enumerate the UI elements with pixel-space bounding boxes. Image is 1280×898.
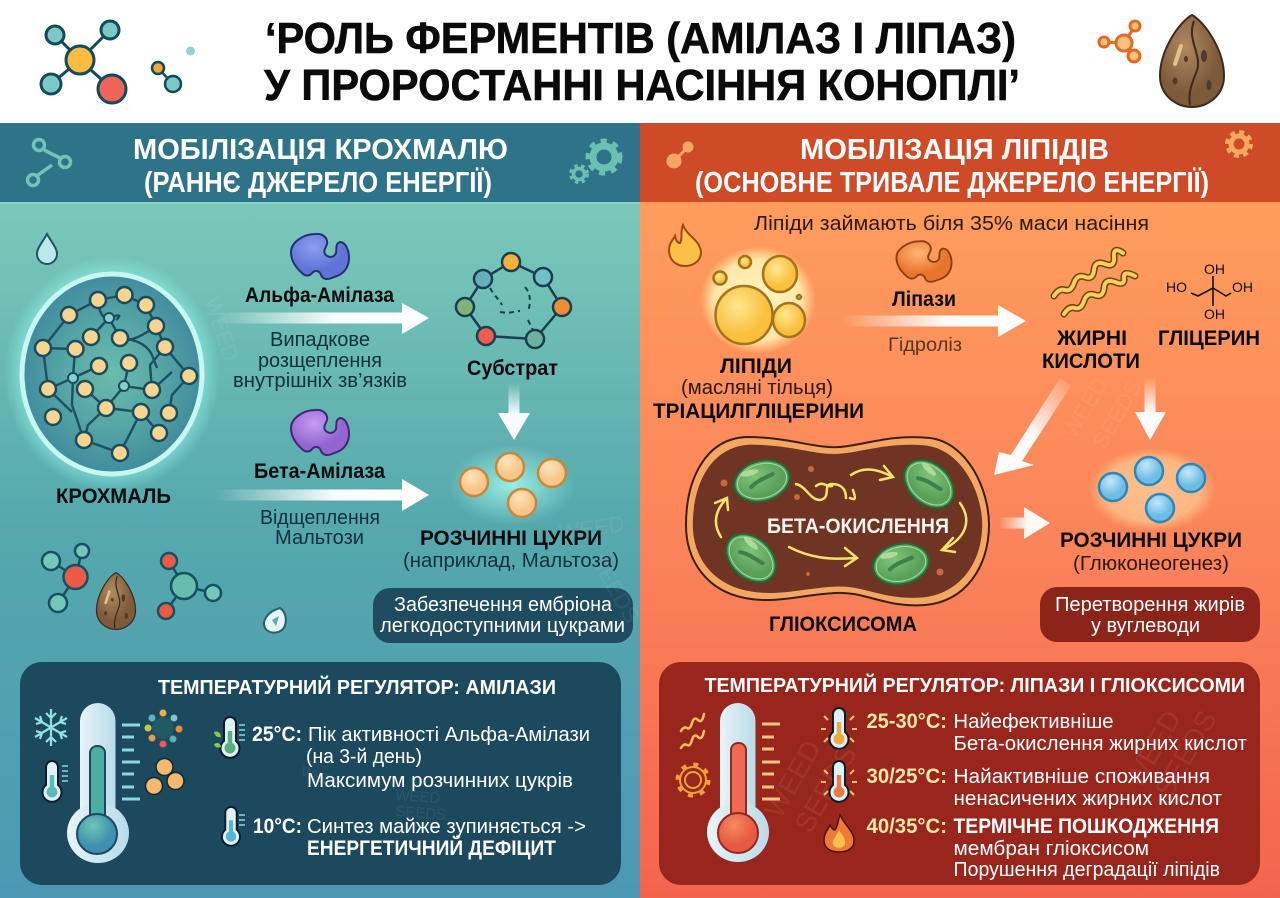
watermarks: WEED [557, 511, 626, 545]
label: soluble sugars right [1060, 528, 1242, 575]
text: 10C row: Синтез майже зупиняється -> [307, 815, 586, 838]
label: glyoxysome: ГЛІОКСИСОМА [769, 613, 917, 636]
panel: lipase temperature regulator [659, 662, 1260, 885]
icon: glycerol formula: HO [1166, 279, 1187, 295]
icon: molecule lower middle [158, 553, 221, 619]
icon: waves [681, 714, 704, 748]
label: lipids [653, 355, 864, 423]
text: 25C row: 25°C: [252, 723, 302, 746]
text: random cleavage: розщеплення [258, 349, 382, 372]
label: lipases: Ліпази [892, 288, 956, 311]
arrow: starch to sugars [215, 479, 429, 511]
icon: orange molecule top right [1099, 21, 1140, 62]
text: 40/35C row [866, 815, 1220, 881]
callout: fat conversion: у вуглеводи [1091, 615, 1200, 637]
icon: small thermometer [42, 761, 68, 802]
arrow: substrate down to sugars [498, 383, 530, 440]
icon: substrate ring [456, 253, 571, 348]
icon: alpha amylase enzyme [291, 234, 349, 279]
callout: fat conversion: Перетворення жирів [1055, 594, 1245, 616]
icon: lipid droplets [700, 246, 816, 354]
label: beta oxidation: БЕТА-ОКИСЛЕННЯ [767, 515, 949, 538]
section header: lipids: МОБІЛІЗАЦІЯ ЛІПІДІВ [800, 134, 1109, 166]
panel: starch mobilization [0, 123, 640, 898]
label: starch: КРОХМАЛЬ [56, 485, 171, 508]
label: alpha amylase: Альфа-Амілаза [245, 284, 394, 307]
text: maltose cleavage [260, 506, 380, 549]
text: random cleavage [233, 328, 407, 392]
label: substrate: Субстрат [467, 357, 558, 380]
watermarks: WEED [1058, 373, 1112, 442]
text: 25C row: (на 3-й день) [306, 745, 422, 768]
text: 10C row [253, 815, 586, 860]
label: glycerol: ГЛІЦЕРИН [1158, 327, 1260, 350]
icon: 10 degree thermometer [222, 807, 245, 846]
text: random cleavage: Випадкове [270, 328, 370, 351]
arrow: lipids to fatty acids [842, 305, 1026, 337]
label: beta amylase: Бета-Амілаза [254, 460, 385, 483]
icon: fatty acids [1054, 250, 1135, 314]
diagram: starch granule [4, 256, 220, 492]
callout: embryo supply [373, 588, 633, 643]
text: 10C row: ЕНЕРГЕТИЧНИЙ ДЕФІЦИТ [307, 836, 556, 860]
icon: small molecule top [152, 46, 195, 92]
icon: flame small [824, 815, 854, 852]
section header: starch: (РАННЄ ДЖЕРЕЛО ЕНЕРГІЇ) [144, 166, 492, 199]
watermarks: WEED [299, 763, 344, 792]
text: random cleavage: внутрішніх зв’язків [233, 369, 407, 392]
heading: amylase regulator: ТЕМПЕРАТУРНИЙ РЕГУЛЯТОР: АМІЛАЗИ [158, 675, 556, 699]
text: 30/25C row: ненасичених жирних кислот [954, 787, 1223, 810]
text: 25C row: Максимум розчинних цукрів [307, 769, 573, 792]
icon: header molecule right [668, 143, 692, 167]
section header: starch: МОБІЛІЗАЦІЯ КРОХМАЛЮ [133, 134, 508, 166]
label: fatty acids: КИСЛОТИ [1042, 350, 1140, 373]
label: fatty acids [1042, 327, 1140, 373]
callout: embryo supply: Забезпечення ембріона [394, 594, 613, 616]
icon: header gear right [1227, 132, 1251, 156]
label: soluble sugars right: РОЗЧИННІ ЦУКРИ [1060, 528, 1242, 552]
panel: lipid mobilization [640, 123, 1280, 898]
icon: sugars in panel [146, 758, 184, 794]
icon: snowflake [35, 709, 67, 746]
watermarks: SEEDS [586, 550, 645, 627]
watermarks [199, 294, 1223, 838]
icon: glycerol formula: OH [1232, 279, 1253, 295]
icon: ring of dots [144, 710, 182, 748]
label: soluble sugars: РОЗЧИННІ ЦУКРИ [420, 526, 602, 550]
text: 25C row: Пік активності Альфа-Амілази [308, 723, 590, 746]
diagram: glyoxysome [686, 437, 989, 605]
icon: blue sugars [1088, 448, 1216, 532]
icon: hemp seed lower [96, 572, 136, 630]
heading: lipase regulator: ТЕМПЕРАТУРНИЙ РЕГУЛЯТОР: ЛІПАЗИ І ГЛІОКСИСОМИ [704, 673, 1245, 697]
watermarks: WEED [1118, 705, 1187, 793]
icon: header molecule left [28, 140, 70, 186]
icon: large thermometer red [707, 703, 769, 862]
watermarks: WEED [199, 294, 243, 364]
text: maltose cleavage: Відщеплення [260, 506, 380, 529]
text: lipid share: Ліпіди займають біля 35% маси насіння [754, 212, 1149, 235]
section header: lipids [640, 123, 1280, 204]
icon: beta amylase enzyme [291, 410, 349, 455]
icon: molecule lower left [42, 544, 89, 612]
icon: thermometer 30/25 [821, 761, 857, 802]
watermarks: WEED [758, 735, 827, 823]
label: soluble sugars right: (Глюконеогенез) [1073, 552, 1229, 575]
title: ‘РОЛЬ ФЕРМЕНТІВ (АМІЛАЗ І ЛІПАЗ) [265, 14, 1016, 63]
text: 25-30C row: Найефективніше [954, 710, 1114, 733]
icon: 25 degree thermometer [214, 717, 245, 758]
icon: thermometer 25-30 [821, 708, 857, 749]
text: 25-30C row: Бета-окислення жирних кислот [954, 732, 1248, 755]
icon: lipase enzyme [896, 241, 952, 282]
thermometer ticks [122, 725, 140, 799]
text: 30/25C row: Найактивніше споживання [954, 765, 1210, 788]
text: 30/25C row: 30/25°C: [866, 765, 947, 788]
text: hydrolysis: Гідроліз [888, 334, 962, 356]
panel: amylase temperature regulator [20, 662, 621, 885]
watermarks: WEED [395, 787, 441, 807]
section header: starch [0, 123, 640, 204]
text: 40/35C row: ТЕРМІЧНЕ ПОШКОДЖЕННЯ [954, 815, 1219, 838]
label: lipids: (масляні тільця) [681, 376, 833, 399]
icon: glycerol formula: OH [1204, 306, 1225, 322]
watermarks: SEEDS [788, 740, 863, 838]
icon: soluble sugars [448, 445, 576, 525]
icon: flame [669, 225, 701, 266]
text: maltose cleavage: Мальтози [275, 526, 364, 549]
arrow: starch to substrate [216, 303, 429, 334]
icon: glycerol formula: OH [1204, 261, 1225, 277]
thermometer ticks red [762, 724, 780, 799]
title [264, 14, 1020, 110]
label: lipids: ТРІАЦИЛГЛІЦЕРИНИ [653, 400, 864, 423]
icon: molecule top left [41, 21, 126, 103]
label: fatty acids: ЖИРНІ [1056, 327, 1127, 350]
text: 25-30C row: 25-30°C: [866, 710, 947, 733]
watermarks: SEEDS [1088, 375, 1147, 452]
watermarks: SEEDS [395, 803, 447, 824]
text: 40/35C row: Порушення деградації ліпідів [954, 858, 1220, 881]
icon: gear [678, 764, 708, 796]
icon: hemp seed top right [1160, 15, 1224, 107]
arrow: fatty acids to glyoxysome [994, 378, 1071, 475]
text: 30/25C row [866, 765, 1223, 810]
icon: header gears [570, 141, 620, 182]
text: 25C row [252, 723, 590, 792]
text: 25-30C row [866, 710, 1248, 755]
callout: fat conversion [1040, 587, 1260, 642]
text: 10C row: 10°C: [253, 815, 302, 838]
icon: crystal [264, 608, 286, 633]
callout: embryo supply: легкодоступними цукрами [380, 615, 625, 637]
label: soluble sugars: (наприклад, Мальтоза) [403, 549, 619, 572]
arrow: glyoxysome to sugars [999, 507, 1050, 539]
icon: large thermometer [67, 703, 129, 863]
label: lipids: ЛІПІДИ [720, 355, 792, 378]
text: 40/35C row: 40/35°C: [866, 815, 947, 838]
text: 40/35C row: мембран гліоксисом [954, 837, 1149, 860]
section header: lipids: (ОСНОВНЕ ТРИВАЛЕ ДЖЕРЕЛО ЕНЕРГІЇ) [695, 166, 1209, 199]
watermarks: SEEDS [1148, 705, 1223, 803]
label: soluble sugars [403, 526, 619, 572]
title: У ПРОРОСТАННІ НАСІННЯ КОНОПЛІ’ [264, 61, 1020, 110]
icon: droplet [37, 234, 57, 264]
icon: glycerol formula [1166, 261, 1253, 322]
arrow: fatty acids to sugars [1135, 377, 1166, 440]
